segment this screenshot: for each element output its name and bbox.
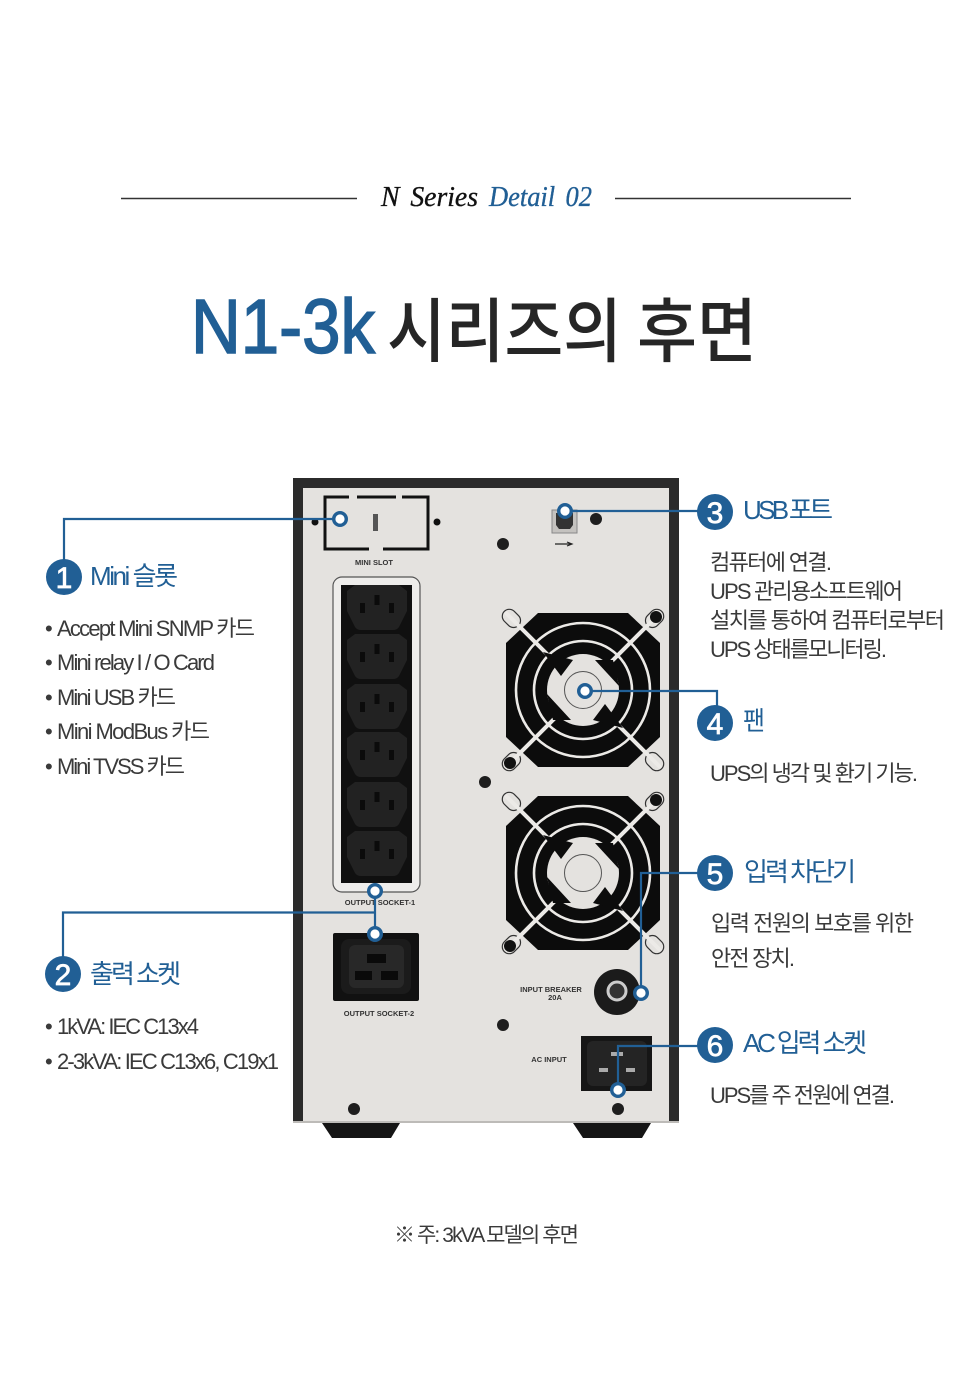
callout 3: USB port: UPS 관리용소프트웨어 — [710, 579, 903, 604]
callout 2: output socket: • — [45, 1014, 53, 1039]
fan 2 — [499, 789, 667, 957]
callout 2: output socket: 출력 소켓 — [90, 959, 181, 989]
input breaker: INPUT BREAKER — [520, 985, 582, 994]
connector line 5 — [641, 873, 700, 993]
eyebrow heading: Detail 02 — [488, 182, 592, 213]
output socket 2: OUTPUT SOCKET-2 — [344, 1009, 414, 1018]
connector line 2 — [63, 891, 375, 960]
title: 시리즈의 — [387, 293, 622, 371]
header rule right — [615, 198, 851, 200]
callout 1: mini slot: 1 — [56, 562, 72, 595]
eyebrow heading: N Series — [380, 182, 478, 213]
UPS rear panel — [293, 478, 679, 1138]
callout 1: mini slot: Mini USB 카드 — [57, 685, 176, 710]
callout 5: input breaker: 5 — [707, 858, 723, 891]
callout 6: AC input — [697, 1027, 895, 1108]
ac input: AC INPUT — [531, 1055, 567, 1064]
bottom edge — [293, 1121, 679, 1123]
callout 1: mini slot: Mini TVSS 카드 — [57, 754, 185, 779]
callout 4: fan: 팬 — [743, 706, 765, 736]
mini slot — [312, 497, 440, 567]
callout 1: mini slot: • — [45, 650, 53, 675]
output socket 2 — [333, 933, 419, 1018]
footnote: ※ 주: 3kVA 모델의 후면 — [394, 1224, 579, 1247]
callout 1: mini slot: • — [45, 616, 53, 641]
callout 4: fan: 4 — [707, 708, 723, 741]
output socket 1 group — [333, 577, 420, 907]
callout 1: mini slot: Accept Mini SNMP 카드 — [57, 616, 255, 641]
callout 6: AC input: UPS를 주 전원에 연결. — [710, 1083, 895, 1108]
callout 5: input breaker — [697, 855, 914, 971]
enclosure — [293, 478, 679, 1122]
callout 3: USB port: USB 포트 — [743, 495, 833, 525]
callout 1: mini slot: • — [45, 685, 53, 710]
screws — [348, 513, 624, 1115]
callout 1: mini slot: Mini ModBus 카드 — [57, 719, 210, 744]
callout 3: USB port: UPS 상태를모니터링. — [710, 637, 887, 662]
fan 1 — [499, 606, 667, 774]
connector line 6 — [618, 1046, 700, 1090]
callout 1: mini slot: Mini 슬롯 — [90, 561, 178, 591]
output socket 1 group: OUTPUT SOCKET-1 — [345, 898, 415, 907]
callout 6: AC input: 6 — [707, 1030, 723, 1063]
callout 3: USB port: 설치를 통하여 컴퓨터로부터 — [710, 608, 945, 633]
eyebrow heading — [380, 182, 592, 213]
title: 후면 — [637, 293, 757, 371]
back plate — [303, 488, 669, 1122]
callout 1: mini slot — [45, 559, 255, 779]
callout 2: output socket: 2-3kVA: IEC C13x6, C19x1 — [57, 1049, 279, 1074]
header rule left — [121, 198, 357, 200]
connector line 1 — [64, 519, 340, 565]
callout 5: input breaker: 안전 장치. — [711, 946, 795, 971]
callout 3: USB port: 컴퓨터에 연결. — [710, 550, 832, 575]
callout 5: input breaker: 입력 차단기 — [744, 857, 856, 887]
callout 3: USB port: 3 — [707, 497, 723, 530]
callout 1: mini slot: • — [45, 719, 53, 744]
mini slot: MINI SLOT — [355, 558, 393, 567]
ac input — [531, 1036, 652, 1091]
connector line 4 — [585, 691, 717, 708]
input breaker: 20A — [548, 993, 562, 1002]
callout 4: fan — [697, 705, 918, 786]
callout 2: output socket: 2 — [55, 959, 71, 992]
usb port — [552, 510, 577, 546]
title — [191, 284, 757, 371]
callout 1: mini slot: Mini relay I / O Card — [57, 650, 215, 675]
title: N1-3k — [191, 284, 375, 370]
callout 2: output socket: • — [45, 1049, 53, 1074]
connector line 3 — [565, 510, 700, 512]
callout 3: USB port — [697, 494, 945, 662]
callout 4: fan: UPS의 냉각 및 환기 기능. — [710, 761, 918, 786]
callout 6: AC input: AC 입력 소켓 — [743, 1028, 867, 1058]
marker dots — [334, 505, 647, 1096]
callout 5: input breaker: 입력 전원의 보호를 위한 — [711, 911, 914, 936]
feet — [322, 1123, 651, 1138]
callout 1: mini slot: • — [45, 754, 53, 779]
input breaker — [520, 969, 640, 1015]
callout 2: output socket: 1kVA: IEC C13x4 — [57, 1014, 199, 1039]
callout 2: output socket — [45, 956, 279, 1074]
